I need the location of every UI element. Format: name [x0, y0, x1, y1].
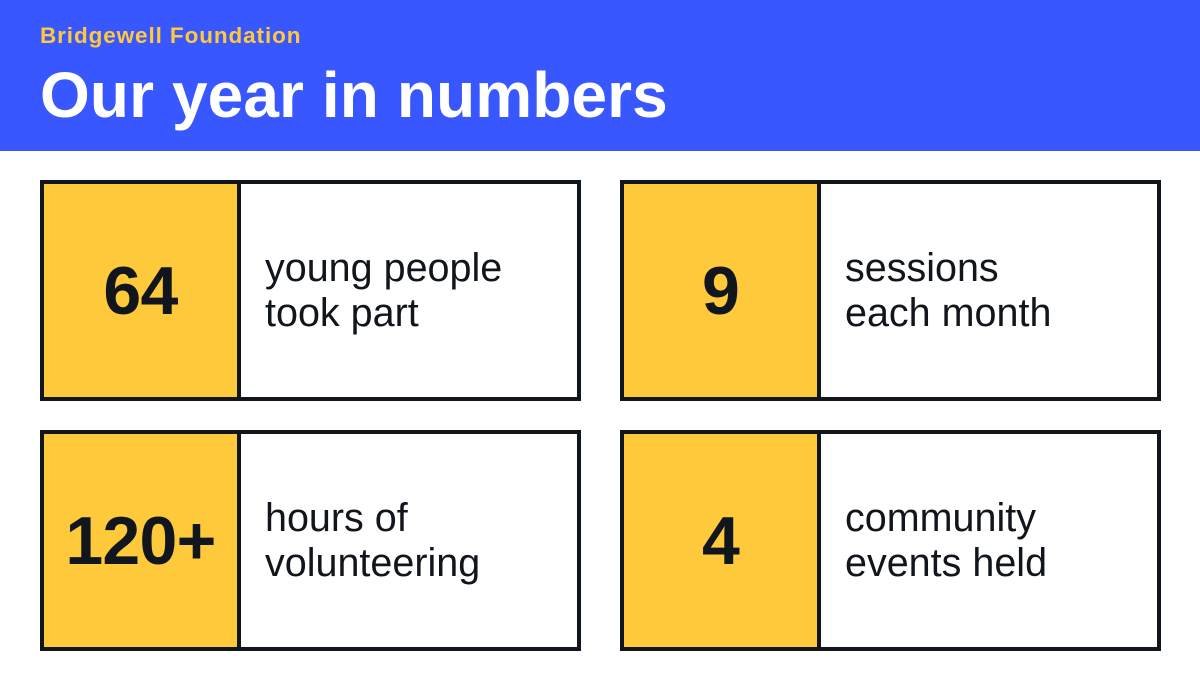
label: community events held: events held	[845, 541, 1047, 585]
number: 120+	[44, 434, 241, 647]
label: hours of volunteering: hours of	[265, 496, 408, 540]
organisation name: Bridgewell Foundation	[40, 23, 301, 48]
number: 64: 64	[103, 252, 178, 328]
label: young people took part	[265, 246, 502, 335]
label: hours of volunteering: volunteering	[265, 541, 480, 585]
stat card: volunteering hours	[40, 430, 581, 651]
label: community events held	[845, 496, 1047, 585]
number: 4: 4	[702, 502, 739, 578]
label: sessions each month: sessions	[845, 246, 999, 290]
number: 64	[44, 184, 241, 397]
label: sessions each month	[845, 246, 1051, 335]
label: sessions each month: each month	[845, 291, 1051, 335]
title: Our year in numbers	[40, 59, 668, 131]
number: 4	[624, 434, 821, 647]
label: young people took part: took part	[265, 291, 419, 335]
stat card: sessions	[620, 180, 1161, 401]
header banner	[0, 0, 1200, 151]
stat card: community events	[620, 430, 1161, 651]
label: hours of volunteering	[265, 496, 480, 585]
label: young people took part: young people	[265, 246, 502, 290]
label: community events held: community	[845, 496, 1036, 540]
number: 9	[624, 184, 821, 397]
number: 120+: 120+	[65, 502, 216, 578]
stat card: young people	[40, 180, 581, 401]
number: 9: 9	[702, 252, 739, 328]
